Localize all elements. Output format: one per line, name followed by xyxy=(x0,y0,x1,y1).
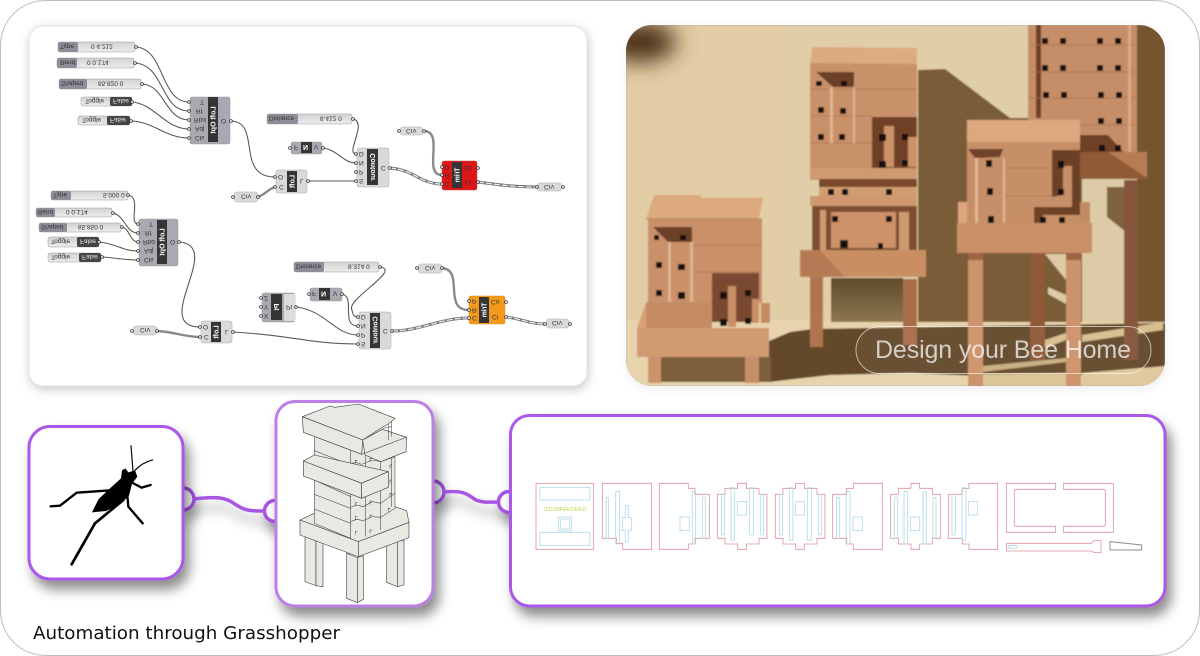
node: loft upper: L xyxy=(300,177,304,184)
node: curve param xyxy=(234,192,258,202)
upper sliders and toggles: False xyxy=(110,116,126,123)
card: laser-cut sheet xyxy=(510,416,1165,606)
part: label plate xyxy=(536,483,594,549)
lower sliders and toggles xyxy=(36,191,128,262)
panel: bee home photo xyxy=(604,22,1165,386)
node: loft options upper: Adj xyxy=(195,125,204,132)
node: contour upper: Contour xyxy=(370,153,377,181)
button: design your bee home: Design your Bee Home xyxy=(875,336,1131,364)
node: curve output lower xyxy=(546,319,569,328)
node: loft options lower: Cls xyxy=(144,256,154,263)
node: trim red: Cl xyxy=(465,178,472,185)
slider: distance upper: Distance xyxy=(269,114,295,122)
upper sliders and toggles: Toggle xyxy=(85,97,105,104)
node: point: Y xyxy=(264,303,269,310)
3D tower drawing xyxy=(300,404,409,603)
node: contour lower: N xyxy=(361,322,366,329)
node: curve to trim lower: Crv xyxy=(425,264,436,271)
upper sliders and toggles: 0 0.174 xyxy=(87,58,109,66)
node: N upper xyxy=(291,142,322,154)
node: point: Z xyxy=(264,294,268,301)
icon: grasshopper silhouette xyxy=(51,446,153,564)
lower sliders and toggles: Shaped xyxy=(41,223,64,230)
node: loft upper: Loft xyxy=(290,175,296,189)
button: design your bee home xyxy=(856,326,1151,374)
node: curve output lower: Crv xyxy=(552,319,563,326)
upper sliders and toggles: Shaped xyxy=(61,80,84,86)
node: trim red: R xyxy=(445,171,450,178)
card: 3D model of bee home xyxy=(276,402,433,606)
node: point: Pt xyxy=(286,303,292,310)
upper sliders and toggles: Bend xyxy=(60,58,76,66)
slider: distance lower: Distance xyxy=(296,262,322,270)
lower sliders and toggles: 0 0.174 xyxy=(66,208,88,215)
node: N lower xyxy=(310,288,342,301)
node: trim red: C xyxy=(445,180,450,187)
node: trim orange: Cl xyxy=(492,313,499,320)
node: point: Pt xyxy=(274,304,281,311)
upper sliders and toggles xyxy=(57,42,141,125)
node: loft upper: O xyxy=(278,173,283,180)
node: loft options upper: O xyxy=(221,117,226,124)
node: loft options lower: O xyxy=(170,238,175,245)
node: loft options lower: Rf xyxy=(145,229,152,236)
lower sliders and toggles: 5.000 0 xyxy=(103,191,125,198)
node: loft options upper: Rbd xyxy=(194,116,206,123)
node: loft lower: L xyxy=(225,328,229,335)
node: point xyxy=(262,293,295,322)
slider: distance lower xyxy=(294,262,379,272)
part: wedge xyxy=(1110,542,1142,550)
node: trim orange: R xyxy=(472,306,477,313)
node: N lower: F xyxy=(312,290,316,296)
node: trim red: Co xyxy=(464,164,473,171)
node: trim orange: P xyxy=(472,297,476,304)
part: panel eight xyxy=(948,483,998,549)
cut parts right group xyxy=(833,483,1142,553)
node: loft options upper: Loft Opt xyxy=(210,106,218,134)
node: trim orange xyxy=(469,296,505,324)
part: panel five xyxy=(775,483,825,549)
node: curve to trim upper: Crv xyxy=(406,127,417,134)
card: grasshopper logo xyxy=(29,426,183,579)
title: Automation through Grasshopper xyxy=(33,624,341,644)
node: N lower: V xyxy=(333,290,338,296)
part: label plate: 02100FEEDEFO xyxy=(544,507,587,513)
node: trim orange: C xyxy=(472,314,477,321)
part: panel six xyxy=(833,483,882,549)
node: loft options upper: T xyxy=(200,98,204,105)
node: contour upper: S xyxy=(359,177,364,184)
upper sliders and toggles: Toggle xyxy=(82,116,102,123)
part: long tab xyxy=(1007,541,1101,553)
node: N upper: V xyxy=(314,143,319,150)
node: loft options lower: Rbd xyxy=(143,238,155,245)
node: loft lower: O xyxy=(203,323,208,330)
node: contour upper: C xyxy=(381,164,386,171)
node: loft options upper xyxy=(190,97,230,144)
floor shadows xyxy=(661,322,1165,386)
node: loft lower: C xyxy=(204,333,209,340)
node: loft options upper: Cls xyxy=(195,134,205,141)
slider: distance upper: 8.412 0 xyxy=(320,114,342,122)
part: panel four xyxy=(717,483,767,549)
lower sliders and toggles: 65.850 0 xyxy=(78,223,104,230)
part: panel two xyxy=(602,483,652,549)
node: trim red: Trim xyxy=(454,168,462,182)
node: contour lower: D xyxy=(361,313,366,320)
lower sliders and toggles: Toggle xyxy=(51,253,71,260)
node: loft lower xyxy=(201,321,232,343)
node: contour lower: S xyxy=(361,340,366,347)
node: contour upper xyxy=(357,148,389,187)
node: trim orange: Co xyxy=(491,298,500,305)
lower sliders and toggles: Type xyxy=(53,191,67,198)
node: loft options lower xyxy=(139,219,178,266)
wall and floor background xyxy=(604,22,1165,386)
node: N lower: N xyxy=(321,290,326,296)
part: panel seven xyxy=(891,483,940,549)
upper sliders and toggles: 0 4.212 xyxy=(91,42,113,50)
node: curve param lower xyxy=(133,326,157,335)
node: contour lower xyxy=(359,312,391,349)
connector: model to laser-cut sheet xyxy=(433,481,520,512)
node: loft upper: C xyxy=(279,183,284,190)
node: contour lower: Contour xyxy=(372,316,380,344)
connector: grasshopper to model xyxy=(183,488,286,522)
node: loft lower: Loft xyxy=(214,325,220,339)
node: loft options lower: T xyxy=(149,220,153,227)
small left house xyxy=(637,195,770,383)
cut parts left group xyxy=(536,483,825,549)
node: N upper: F xyxy=(294,143,298,150)
connection ports xyxy=(98,46,571,345)
lower sliders and toggles: Bend xyxy=(38,208,54,215)
node: curve output upper: Crv xyxy=(544,183,555,190)
lower sliders and toggles: False xyxy=(82,253,98,260)
node: contour lower: C xyxy=(383,327,388,334)
tall back house xyxy=(1028,25,1147,360)
right house xyxy=(957,120,1092,386)
node: loft options lower: Adj xyxy=(144,247,153,254)
node: trim red: P xyxy=(445,163,449,170)
part: frame right half xyxy=(1064,483,1113,532)
panel: grasshopper definition graph xyxy=(29,26,587,386)
lower sliders and toggles: False xyxy=(80,238,96,244)
part: panel three xyxy=(659,483,709,549)
node: curve to trim upper xyxy=(400,127,423,135)
slider: distance upper xyxy=(267,114,352,124)
node: contour upper: N xyxy=(359,159,364,166)
node: loft upper xyxy=(276,170,307,193)
lower sliders and toggles: Toggle xyxy=(51,238,71,244)
node: contour lower: P xyxy=(361,331,365,338)
node: curve param lower: Crv xyxy=(140,326,151,333)
node: contour upper: P xyxy=(359,168,363,175)
wires upper xyxy=(131,47,537,197)
node: trim orange: Trim xyxy=(482,303,488,317)
node: contour upper: D xyxy=(359,150,364,157)
node: curve param: Crv xyxy=(241,192,252,200)
node: curve to trim lower xyxy=(418,264,442,273)
node: curve output upper xyxy=(537,183,562,191)
node: loft options lower: Loft Opt xyxy=(160,228,166,256)
node: trim red xyxy=(442,161,477,190)
wires lower xyxy=(99,195,545,344)
middle house xyxy=(800,47,926,347)
upper sliders and toggles: Type xyxy=(60,42,74,50)
node: loft options upper: Rf xyxy=(196,107,203,114)
upper sliders and toggles: False xyxy=(113,97,129,104)
node: N upper: N xyxy=(303,143,308,150)
node: point: X xyxy=(264,312,269,319)
slider: distance lower: 8.314 0 xyxy=(348,262,370,270)
part: frame left half xyxy=(1006,483,1056,532)
upper sliders and toggles: 65.820 0 xyxy=(98,80,124,86)
